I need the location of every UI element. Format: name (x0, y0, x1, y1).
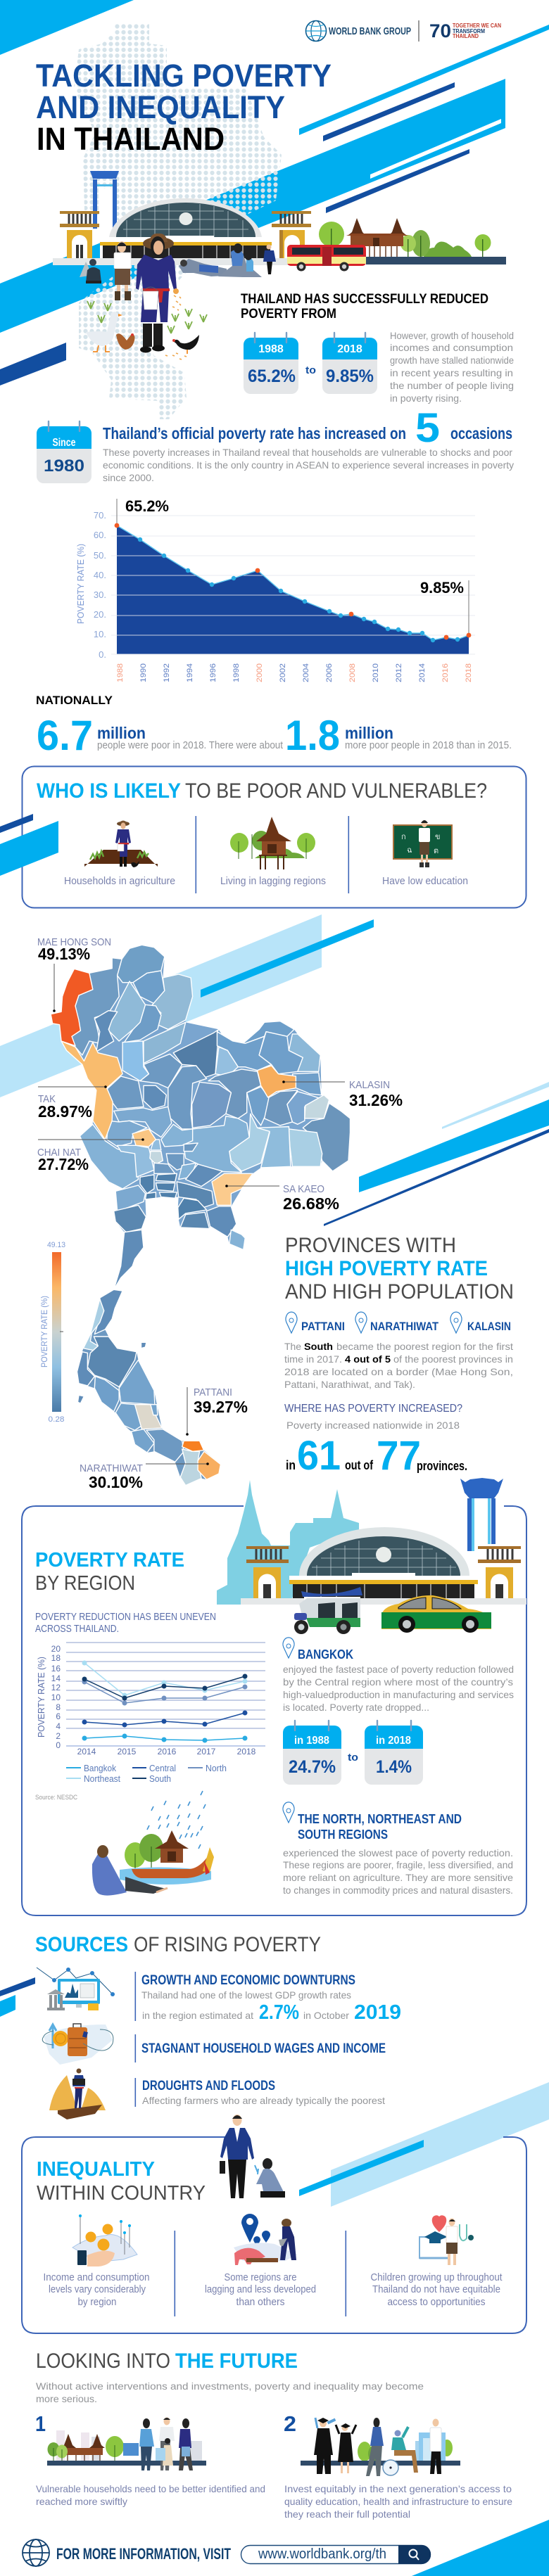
captions (64, 875, 468, 887)
icon: globe (23, 2539, 49, 2566)
heading: who is likely (37, 779, 487, 803)
text: the South became the poorest: time in 2017. (284, 1353, 342, 1365)
area chart: national poverty rate: 2000 (255, 663, 264, 682)
background diagonal stripes: map (0, 914, 549, 1226)
area chart: national poverty rate: 2012 (395, 663, 403, 682)
text: the South became the poorest: 2018 are located on a border (Mae Hong Son, (284, 1366, 513, 1377)
captions: Children growing up throughout (370, 2272, 503, 2283)
stat: 61 out of 77 provinces: out of (345, 1458, 374, 1472)
captions: access to opportunities (387, 2297, 486, 2308)
area chart: national poverty rate: 0. (99, 649, 106, 660)
icon: student at blackboard (393, 820, 452, 867)
number 1: 1 (35, 2411, 46, 2436)
heading: where has poverty increased: WHERE HAS POVERTY INCREASED? (284, 1403, 462, 1415)
stat: 61 out of 77 provinces: provinces. (417, 1459, 467, 1473)
captions: Living in lagging regions (220, 875, 326, 887)
captions: lagging and less developed (205, 2284, 316, 2295)
rule (135, 2034, 136, 2062)
logo: World Bank Group: WORLD BANK GROUP (329, 25, 411, 37)
source 1: growth and economic downturns: in October (303, 2010, 349, 2021)
calendar: since 1980: 1980 (44, 457, 84, 476)
source note: Source: NESDC (35, 1794, 77, 1801)
calendar: in 2018 1.4%: in 2018 (376, 1735, 411, 1747)
icon: economic downturn monitor (37, 1968, 115, 2010)
icon: region pins and farmer (234, 2214, 297, 2265)
captions: Households in agriculture (64, 875, 175, 887)
area chart: national poverty rate: 2018 (465, 663, 473, 682)
text: Bangkok poverty reduction (283, 1664, 514, 1713)
Bangkok heading and pin (283, 1638, 353, 1662)
heading: reduced poverty: THAILAND HAS SUCCESSFULLY REDUCED (241, 291, 488, 307)
text: growth has stalled: incomes and consumption (390, 342, 513, 353)
line chart: poverty rate by region: 6 (56, 1711, 61, 1721)
icon: house and trees (230, 817, 315, 869)
line chart: poverty rate by region: 0 (56, 1740, 61, 1750)
province pins: NARATHIWAT (370, 1320, 439, 1333)
heading: provinces with high poverty rate: PROVINCES WITH (285, 1234, 456, 1257)
source 1: growth and economic downturns: in the region estimated at (142, 2010, 253, 2021)
road (366, 257, 506, 264)
calendar: in 2018 1.4%: 1.4% (376, 1757, 412, 1777)
map callout: Narathiwat: 30.10% (89, 1473, 143, 1491)
stat: 1.8 million: million (345, 724, 393, 742)
icon: student at blackboard: ฉ (407, 846, 412, 855)
text: Bangkok poverty reduction: enjoyed the fastest pace of poverty reduction followed (283, 1664, 514, 1675)
source 2: stagnant household wages: STAGNANT HOUSEHOLD WAGES AND INCOME (141, 2041, 386, 2056)
area chart: national poverty rate: 2014 (418, 663, 427, 682)
icon: student at blackboard: ต (434, 847, 438, 855)
calendar: in 2018 1.4% (365, 1721, 423, 1785)
North, Northeast and South heading and pin: SOUTH REGIONS (298, 1828, 388, 1842)
title: IN THAILAND (37, 121, 225, 157)
background diagonal stripes: sources and inequality (0, 1977, 549, 2207)
illustration: households and shoppers (47, 2417, 206, 2470)
stat: 61 out of 77 provinces: in (286, 1458, 296, 1472)
stat: 61 out of 77 provinces: 77 (377, 1433, 421, 1479)
chart legend: South (149, 1773, 171, 1784)
text: slowest pace of poverty reduction: These regions are poorer, fragile, less diversified, and (283, 1859, 513, 1870)
title: TACKLING POVERTY (36, 58, 332, 94)
heading: poverty rate by region (35, 1549, 184, 1595)
line chart: poverty rate by region: 2015 (118, 1747, 137, 1756)
calendar: in 1988 24.7%: in 1988 (294, 1735, 329, 1747)
text: the South became the poorest: South (304, 1341, 333, 1352)
area chart: national poverty rate: 65.2% (125, 497, 169, 515)
province: Sa Kaeo (212, 1173, 253, 1205)
text: poverty increases (103, 447, 514, 483)
map callout: Sa Kaeo (225, 1183, 339, 1213)
stat: 6.7 million: 6.7 (37, 712, 93, 759)
heading: five occasions (103, 405, 512, 451)
rule (135, 1972, 136, 2021)
calendar: 1988 65.2% (244, 333, 298, 394)
bus (287, 245, 366, 272)
source 1: growth and economic downturns: Thailand had one of the lowest GDP growth rates (141, 1989, 351, 2001)
area chart: national poverty rate: 70. (94, 510, 106, 521)
line chart: poverty rate by region: 2 (56, 1731, 61, 1741)
stat: 61 out of 77 provinces: 61 (297, 1433, 341, 1479)
title: AND INEQUALITY (36, 89, 285, 125)
map callout: Sa Kaeo: 26.68% (283, 1194, 339, 1213)
goose and hens (86, 312, 199, 354)
map legend: poverty rate scale: 49.13 (47, 1241, 65, 1249)
map legend: poverty rate scale (41, 1241, 65, 1424)
stat: 61 out of 77 provinces (286, 1433, 467, 1479)
text: growth has stalled: However, growth of household (390, 330, 514, 341)
area chart: national poverty rate: 40. (94, 570, 106, 580)
line chart: poverty rate by region: 10 (51, 1692, 61, 1702)
line chart: poverty rate by region: 12 (51, 1683, 61, 1692)
area chart: national poverty rate: 1988 (116, 663, 125, 682)
stat: 1.8 million: 1.8 (285, 712, 340, 759)
illustration: temples and station (217, 1478, 526, 1634)
chart title: ACROSS THAILAND. (35, 1623, 119, 1635)
text: without active interventions (36, 2380, 424, 2404)
Thai stilt house (346, 218, 408, 257)
icon: student at blackboard: ข (435, 833, 441, 841)
dotted map of Thailand (74, 23, 282, 419)
area chart: national poverty rate: 60. (94, 530, 106, 540)
chart title: POVERTY REDUCTION HAS BEEN UNEVEN (35, 1611, 216, 1623)
text: the South became the poorest: Pattani, Narathiwat, and Tak). (284, 1379, 415, 1390)
farmer feeding chickens (136, 234, 187, 359)
line chart: poverty rate by region: 20 (51, 1644, 61, 1654)
heading: poverty rate by region: POVERTY RATE (35, 1549, 184, 1571)
heading: sources of rising poverty: SOURCES (35, 1933, 128, 1956)
captions: Thailand do not have equitable (372, 2284, 500, 2295)
North, Northeast and South heading and pin: THE NORTH, NORTHEAST AND (298, 1812, 462, 1826)
province choropleth map of Thailand (51, 945, 350, 1486)
heading: five occasions: 5 (415, 405, 440, 451)
source 3: droughts and floods: Affecting farmers who are already typically the poorest (142, 2095, 385, 2106)
calendar: 1988 65.2%: 1988 (258, 343, 284, 355)
province: Pattani (182, 1441, 204, 1451)
logo: World Bank Group: 70 (429, 20, 451, 42)
province pins (286, 1312, 511, 1333)
text: the South became the poorest: of the poorest provinces in (393, 1353, 513, 1365)
calendar: since 1980 (37, 421, 92, 483)
area chart: national poverty rate: 2002 (279, 663, 287, 682)
province pins: PATTANI (301, 1320, 345, 1333)
people by the station (80, 241, 276, 300)
heading: inequality: WITHIN COUNTRY (37, 2182, 206, 2205)
text: vulnerable households: reached more swiftly (36, 2496, 127, 2507)
text: growth has stalled (390, 330, 514, 404)
calendar: 2018 9.85% (322, 333, 377, 394)
text: invest equitably (284, 2483, 512, 2520)
logo: World Bank Group: THAILAND (453, 33, 479, 39)
map callout: Tak: 28.97% (38, 1102, 92, 1121)
chart legend: Bangkok (84, 1763, 116, 1773)
text: vulnerable households: Vulnerable households need to be better identified and (36, 2483, 265, 2494)
line chart: poverty rate by region (37, 1643, 265, 1756)
area chart: national poverty rate: 1992 (163, 663, 171, 682)
captions: Some regions are (224, 2272, 297, 2283)
heading: who is likely: WHO IS LIKELY (37, 779, 181, 803)
icon: health and education (419, 2215, 474, 2265)
map callout: Pattani: 39.27% (194, 1398, 248, 1416)
calendar: in 1988 24.7% (283, 1721, 341, 1785)
heading: five occasions: Thailand’s official poverty rate has increased on (103, 424, 406, 442)
North, Northeast and South heading and pin (283, 1802, 462, 1842)
stat: 1.8 million (285, 712, 512, 759)
calendar: 1988 65.2%: 65.2% (248, 366, 296, 386)
heading: reduced poverty (241, 291, 488, 321)
text: growth has stalled: growth have stalled nationwide (390, 355, 514, 366)
graduates (314, 2418, 356, 2474)
right pavilion (272, 211, 311, 258)
illustration: businessman and woman (220, 2115, 285, 2198)
area chart: national poverty rate: 20. (94, 609, 106, 620)
chart legend: Northeast (84, 1773, 120, 1784)
map callout: Pattani: PATTANI (194, 1386, 232, 1398)
heading: provinces with high poverty rate: HIGH POVERTY RATE (285, 1257, 488, 1280)
text: slowest pace of poverty reduction: experienced the slowest pace of poverty reduction. (283, 1847, 513, 1858)
chart legend (66, 1763, 227, 1784)
logo: World Bank Group: TRANSFORM (453, 28, 485, 34)
area chart: national poverty rate: 2008 (348, 663, 357, 682)
text: without active interventions: Without active interventions and investments, poverty and inequality may become (36, 2380, 424, 2392)
text: invest equitably: Invest equitably in the next generation’s access to (284, 2483, 512, 2494)
search box: www.worldbank.org/th (258, 2546, 386, 2562)
area chart: national poverty rate: 1998 (232, 663, 241, 682)
footer: for more information (23, 2539, 431, 2566)
text: growth has stalled: in poverty rising. (390, 393, 462, 404)
map callout: Tak (38, 1085, 107, 1121)
heading: who is likely: TO BE POOR AND VULNERABLE? (185, 779, 487, 803)
stat: 1.8 million: more poor people in 2018 than in 2015. (345, 739, 512, 751)
icon: student at blackboard: ก (401, 833, 406, 841)
Bangkok heading and pin: BANGKOK (298, 1647, 353, 1662)
area chart: national poverty rate: 2010 (372, 663, 380, 682)
search box (241, 2545, 431, 2564)
captions (44, 2272, 503, 2308)
heading: inequality: INEQUALITY (37, 2158, 155, 2181)
chart legend: Central (149, 1763, 176, 1773)
map legend: poverty rate scale: POVERTY RATE (%) (41, 1296, 49, 1367)
heading: poverty rate by region: BY REGION (35, 1572, 135, 1595)
province: Chai Nat (132, 1129, 156, 1147)
map: south (77, 1289, 220, 1486)
icon: farmer with drought and hay (49, 2068, 106, 2119)
text: the South became the poorest (284, 1341, 513, 1390)
captions: Have low education (382, 875, 468, 887)
panel: inequality within country (22, 2115, 526, 2333)
source 1: growth and economic downturns (141, 1973, 401, 2024)
area chart: national poverty rate: 9.85% (420, 579, 464, 597)
trees and bush (319, 222, 491, 257)
line chart: poverty rate by region: 2014 (77, 1747, 96, 1756)
province: Mae Hong Son (51, 969, 93, 1046)
heading: provinces with high poverty rate: AND HIGH POPULATION (285, 1280, 514, 1303)
panel: who is likely to be poor (0, 767, 526, 907)
province: Tak (61, 1041, 122, 1140)
map legend: poverty rate scale: 0.28 (48, 1415, 65, 1424)
heading: looking into the future: THE FUTURE (175, 2349, 298, 2373)
captions: levels vary considerably (49, 2284, 146, 2295)
stat: 6.7 million (37, 712, 284, 759)
illustration: tuk tuk (294, 1587, 362, 1634)
map callout: Sa Kaeo: SA KAEO (283, 1183, 324, 1195)
icon: suitcase and coin (42, 2024, 113, 2065)
text: Bangkok poverty reduction: high-valuedproduction in manufacturing and services (283, 1689, 514, 1700)
area chart: national poverty rate: 10. (94, 629, 106, 639)
connector: to: to (348, 1752, 358, 1764)
icon: farmer in field (84, 820, 158, 867)
map callout: Kalasin: KALASIN (349, 1079, 390, 1091)
text: poverty increases: These poverty increases in Thailand reveal that households are vulnerable to shocks and poor (103, 447, 512, 458)
area chart: national poverty rate (75, 497, 475, 682)
illustration: flood and displaced person (92, 1791, 214, 1896)
text: without active interventions: more serious. (36, 2393, 97, 2404)
text: poverty increases: since 2000. (103, 472, 154, 483)
line chart: poverty rate by region: POVERTY RATE (%) (37, 1657, 46, 1737)
line chart: poverty rate by region: 8 (56, 1702, 61, 1712)
area chart: national poverty rate: 2016 (441, 663, 450, 682)
logo: World Bank Group: TOGETHER WE CAN (453, 23, 501, 29)
line chart: poverty rate by region: 2018 (237, 1747, 256, 1756)
province: Kalasin (258, 1066, 296, 1097)
stat: 6.7 million: million (97, 724, 146, 742)
map: north, northeast, central (51, 945, 350, 1289)
text: the South became the poorest: 4 out of 5 (345, 1353, 391, 1365)
area chart: national poverty rate: 2004 (302, 663, 310, 682)
text: Bangkok poverty reduction: by the Central region where most of the country’s (283, 1676, 513, 1688)
text: slowest pace of poverty reduction (283, 1847, 513, 1896)
area chart: national poverty rate: 50. (94, 550, 106, 561)
heading: looking into the future (36, 2349, 298, 2373)
number 2: 2 (284, 2411, 296, 2436)
title (36, 58, 332, 157)
rice sprouts (87, 301, 207, 333)
icon: money and regional map (72, 2214, 137, 2266)
text: slowest pace of poverty reduction: to changes in commodity prices and natural disasters. (283, 1885, 513, 1896)
heading: provinces with high poverty rate (285, 1234, 514, 1303)
calendar: since 1980: Since (52, 437, 76, 449)
area chart: national poverty rate: 1996 (209, 663, 217, 682)
source 3: droughts and floods: DROUGHTS AND FLOODS (142, 2079, 275, 2093)
area chart: national poverty rate: 30. (94, 589, 106, 600)
map callout: Chai Nat (37, 1138, 144, 1173)
line chart: poverty rate by region: 16 (51, 1664, 61, 1673)
area chart: national poverty rate: POVERTY RATE (%) (75, 544, 86, 624)
footer: for more information: FOR MORE INFORMATION, VISIT (56, 2545, 231, 2563)
province pins: KALASIN (467, 1320, 511, 1333)
panel: poverty rate by region (22, 1478, 526, 1915)
illustration: graduates, patient and hospital (301, 2418, 460, 2476)
text: invest equitably: quality education, health and infrastructure to ensure (284, 2496, 512, 2507)
text: poverty increased nationwide: Poverty increased nationwide in 2018 (286, 1420, 460, 1431)
text: vulnerable households (36, 2483, 265, 2507)
map callout: Mae Hong Son (37, 936, 111, 1012)
illustration: railway station hero (53, 171, 506, 359)
connector: to: to (305, 364, 316, 376)
text: the South became the poorest: The (284, 1341, 301, 1352)
line chart: poverty rate by region: 18 (51, 1653, 61, 1663)
captions: Income and consumption (44, 2272, 149, 2283)
illustration: taxi (381, 1595, 491, 1633)
text: Bangkok poverty reduction: is located. Poverty rate dropped... (283, 1702, 429, 1713)
province: Narathiwat (198, 1451, 220, 1479)
text: poverty increases: economic conditions. It is the only country in ASEAN to experience several increases in poverty (103, 459, 514, 471)
left pavilion (60, 211, 99, 258)
chart title (35, 1611, 216, 1635)
map callout: Narathiwat (80, 1462, 209, 1491)
map callout: Kalasin (282, 1079, 403, 1109)
woman, wheelchair, doctor (366, 2418, 441, 2476)
heading: nationally: NATIONALLY (36, 694, 113, 707)
text: growth has stalled: the number of people living (390, 380, 514, 391)
area chart: national poverty rate: 1994 (186, 663, 194, 682)
logo: World Bank Group (305, 20, 501, 42)
map callout: Tak: TAK (38, 1093, 56, 1105)
text: slowest pace of poverty reduction: more reliant on agriculture. They are more sensitive (283, 1872, 513, 1883)
heading: sources of rising poverty (35, 1933, 321, 1956)
map callout: Mae Hong Son: 49.13% (38, 945, 90, 963)
map callout: Chai Nat: 27.72% (38, 1155, 89, 1173)
corner triangle (412, 2520, 549, 2576)
background diagonal stripes: hero (0, 0, 549, 385)
stat: 6.7 million: people were poor in 2018. There were about (97, 739, 284, 751)
heading: inequality (37, 2158, 206, 2205)
area chart: national poverty rate: 2006 (325, 663, 334, 682)
calendar: in 1988 24.7%: 24.7% (289, 1757, 336, 1777)
captions: by region (77, 2297, 117, 2308)
text: invest equitably: they reach their full potential (284, 2508, 410, 2520)
area chart: national poverty rate: 1990 (139, 663, 148, 682)
heading: sources of rising poverty: OF RISING POVERTY (134, 1933, 321, 1956)
rule (135, 2078, 136, 2107)
line chart: poverty rate by region: 4 (56, 1721, 61, 1731)
line chart: poverty rate by region: 2016 (158, 1747, 177, 1756)
heading: looking into the future: LOOKING INTO (36, 2349, 170, 2373)
map callout: Chai Nat: CHAI NAT (37, 1147, 81, 1159)
source 3: droughts and floods (142, 2079, 385, 2106)
captions: than others (236, 2297, 284, 2308)
calendar: 2018 9.85%: 9.85% (326, 366, 374, 386)
map callout: Kalasin: 31.26% (349, 1091, 403, 1109)
chart legend: North (206, 1763, 227, 1773)
line chart: poverty rate by region: 14 (51, 1673, 61, 1683)
source 1: growth and economic downturns: GROWTH AND ECONOMIC DOWNTURNS (141, 1973, 355, 1988)
text: the South became the poorest: became the poorest region for the first (336, 1341, 513, 1352)
heading: five occasions: occasions (450, 424, 512, 442)
source 1: growth and economic downturns: 2019 (354, 2001, 401, 2024)
shoppers (123, 2417, 193, 2470)
source 1: growth and economic downturns: 2.7% (259, 2001, 299, 2024)
map callout: Pattani (186, 1386, 248, 1436)
calendar: 2018 9.85%: 2018 (337, 343, 362, 355)
map callout: Narathiwat: NARATHIWAT (80, 1462, 143, 1474)
map callout: Mae Hong Son: MAE HONG SON (37, 936, 111, 948)
text: growth has stalled: in recent years resulting in (390, 367, 513, 378)
line chart: poverty rate by region: 2017 (197, 1747, 216, 1756)
heading: reduced poverty: POVERTY FROM (241, 306, 336, 321)
